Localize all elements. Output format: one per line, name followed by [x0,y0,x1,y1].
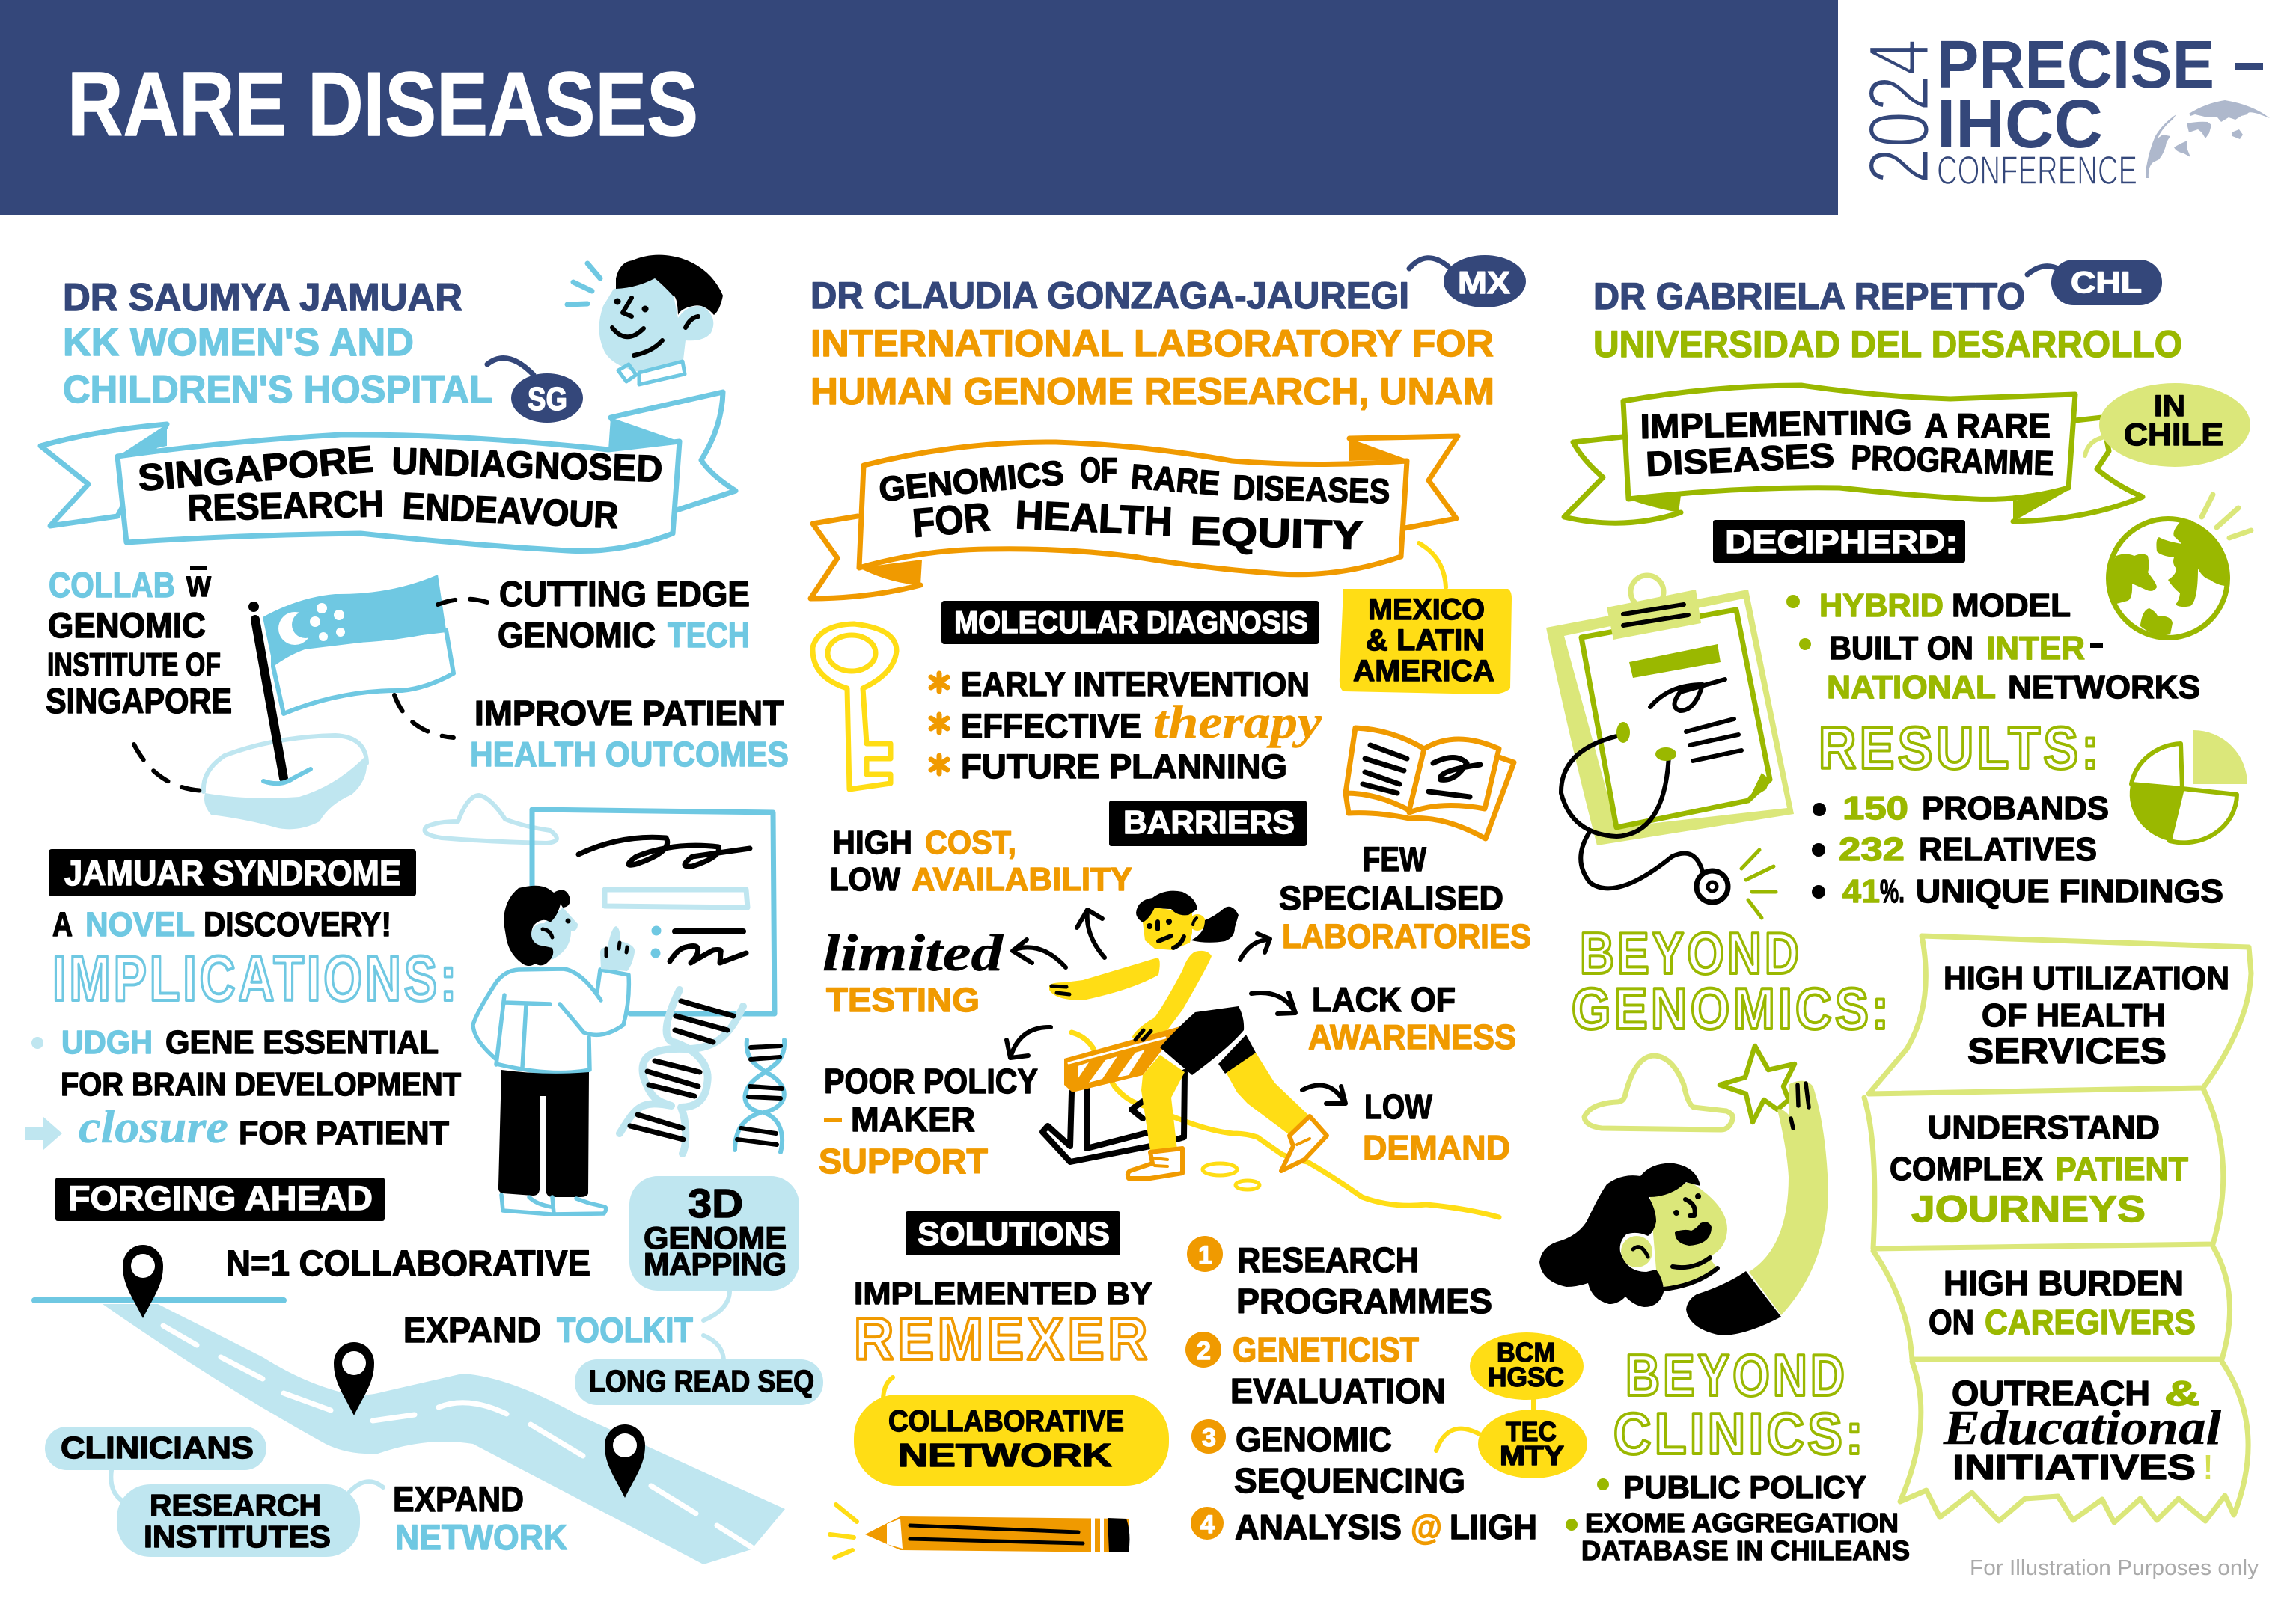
text block: collab with Genomic Institute: INSTITUTE OF [47,646,221,683]
heading: Beyond Genomics [1572,920,1892,1041]
DECIPHERD bullets: BUILT ON [1829,630,1973,667]
heading: Beyond Clinics: BEYOND [1625,1342,1848,1408]
scroll panel text: outreach educational initiatives: OUTREACH [1952,1374,2150,1413]
heading: Beyond Clinics [1613,1342,1866,1466]
bubble: research institutes: RESEARCH [150,1488,321,1522]
heading: Beyond Genomics: GENOMICS: [1572,976,1892,1041]
callout: collaborative network: NETWORK [898,1437,1112,1474]
step 2 [1185,1330,1446,1410]
step 1: 1 [1198,1241,1212,1270]
heading: Solutions: SOLUTIONS [918,1216,1110,1252]
text: N=1 collaborative: N=1 COLLABORATIVE [226,1244,590,1284]
barrier: low demand: DEMAND [1363,1128,1510,1167]
scroll panel text: outreach educational initiatives: INITIATIVES [1952,1448,2196,1487]
results list: UNIQUE FINDINGS [1916,873,2223,910]
scroll panel text: high burden on caregivers [1929,1264,2196,1341]
scroll panel text: outreach educational initiatives [1943,1374,2222,1487]
text block: collab with Genomic Institute: SINGAPORE [46,681,232,720]
illustration: clipboard and stethoscope [1546,575,1794,918]
scroll panel text: complex patient journeys: COMPLEX [1890,1151,2043,1187]
bubble: 3D genome mapping: 3D [688,1181,743,1226]
text block: cutting edge genomic tech [498,574,750,655]
icon: star [1720,1046,1795,1122]
icon: Singapore flag on island [204,575,454,829]
results list [1812,790,2223,910]
heading: DECIPHERD [1713,520,1965,563]
illustration: woman reaching for star [1539,1046,1828,1335]
step 3: SEQUENCING [1234,1461,1465,1500]
step 1 [1187,1236,1492,1320]
barrier: high cost low availability: AVAILABILITY [912,861,1132,898]
text block: collab with Genomic Institute: COLLAB [49,565,175,605]
speaker name and affiliation: DR SAUMYA JAMUAR [63,276,462,319]
text block: improve patient health outcomes: IMPROVE PATIENT [474,694,784,732]
scroll panel text: high utilization: HIGH UTILIZATION [1944,960,2229,997]
banner: Genomics of rare diseases for health equity: HEALTH [1014,492,1173,545]
icon: cloud [1584,1056,1733,1130]
heading: Beyond Genomics: BEYOND [1580,920,1802,986]
icon: pencil [830,1505,1129,1558]
header band [0,0,1838,215]
panel: Dr Gabriela Repetto [1539,260,2259,1580]
barrier: lack of awareness: LACK OF [1312,980,1456,1019]
callout: Mexico and Latin America [1340,543,1512,694]
barrier: high cost low availability: COST, [925,824,1016,861]
text block: collab with Genomic Institute: W [186,572,211,603]
speaker name and affiliation: HUMAN GENOME RESEARCH, UNAM [810,370,1494,412]
heading: Beyond Clinics: CLINICS: [1613,1401,1866,1466]
step 4: 4 [1200,1511,1215,1539]
barrier: high cost low availability: HIGH [832,824,912,861]
barrier: high cost low availability [830,824,1132,898]
bubble: clinicians [45,1427,266,1470]
barrier: limited testing: TESTING [826,981,980,1019]
text block: improve patient health outcomes: HEALTH OUTCOMES [470,735,789,774]
callout: in Chile [2085,383,2250,467]
icon: map pin 1 [123,1245,163,1318]
barrier: high cost low availability: LOW [830,861,900,898]
heading: REMEXER: REMEXER [854,1306,1151,1372]
step 2: EVALUATION [1230,1371,1446,1410]
implications list: UDGH [61,1024,153,1061]
barrier: lack of awareness: AWARENESS [1308,1017,1516,1056]
speaker name and affiliation: DR GABRIELA REPETTO [1593,275,2025,317]
banner: Genomics of rare diseases for health equity: OF [1080,450,1117,489]
banner: Genomics of rare diseases for health equity [810,436,1458,599]
banner: Genomics of rare diseases for health equity: RARE [1129,456,1221,503]
speaker name and affiliation: KK WOMEN'S AND [63,321,414,364]
callout: collaborative network: COLLABORATIVE [888,1405,1124,1438]
implications list: FOR BRAIN DEVELOPMENT [61,1066,461,1103]
title: RARE DISEASES [67,53,698,155]
callout lines from flag [134,599,487,791]
DECIPHERD bullets: INTER [1986,630,2085,667]
text block: cutting edge genomic tech: CUTTING EDGE [499,574,750,613]
illustration: figure jumping hurdle [1042,891,1499,1217]
country tag SG [487,358,583,423]
speaker name and affiliation [1593,275,2182,365]
results list: PROBANDS [1922,790,2109,827]
step 4 [1191,1507,1537,1546]
beyond clinics list: PUBLIC POLICY [1623,1469,1866,1505]
step 3 [1191,1419,1465,1500]
conference logo: IHCC [1937,86,2103,162]
scroll panel text: high utilization: OF HEALTH [1982,997,2166,1034]
icon: key [813,624,897,789]
heading: DECIPHERD: DECIPHERD: [1725,524,1958,560]
country tag MX [1409,255,1526,307]
bubble: research institutes [117,1484,360,1557]
scroll panel text: outreach educational initiatives: ! [2203,1448,2213,1487]
solutions steps [1185,1236,1537,1546]
bubble: 3D genome mapping: MAPPING [644,1246,787,1282]
heading: Forging Ahead: FORGING AHEAD [68,1179,373,1217]
speaker name and affiliation: DR CLAUDIA GONZAGA-JAUREGI [810,275,1409,316]
DECIPHERD bullets: MODEL [1952,587,2071,624]
step 4: LIIGH [1450,1508,1537,1546]
scroll panel text: complex patient journeys: PATIENT [2055,1151,2188,1187]
results list: 232 [1839,831,1905,868]
banner: implementing a rare diseases programme [1564,385,2143,523]
speaker name and affiliation: INTERNATIONAL LABORATORY FOR [810,322,1494,364]
molecular diagnosis list: EFFECTIVE [961,707,1141,745]
DECIPHERD bullets: NETWORKS [2008,669,2200,706]
bubbles: BCM HGSC and TEC MTY [1436,1332,1587,1478]
barrier: few specialised laboratories: LABORATORIES [1282,917,1531,955]
results list: 150 [1842,790,1908,827]
DECIPHERD bullets: NATIONAL [1827,669,1996,706]
banner: implementing a rare diseases programme: PROGRAMME [1851,438,2054,483]
conference logo: CONFERENCE [1937,148,2137,193]
icon: DNA helices [620,990,784,1154]
results list: %. [1880,873,1905,910]
heading: Jamuar Syndrome: JAMUAR SYNDROME [64,853,401,893]
step 1: RESEARCH [1237,1240,1419,1279]
text: expand network [393,1479,567,1557]
speaker name and affiliation: CHILDREN'S HOSPITAL [63,368,492,411]
barrier: few specialised laboratories [1279,840,1531,955]
step 2: GENETICIST [1233,1330,1419,1369]
barrier: low demand [1363,1087,1510,1167]
text block: cutting edge genomic tech: GENOMIC [498,615,656,655]
panel: Dr Saumya Jamuar [25,255,823,1564]
implications list [25,1024,461,1153]
bubbles: BCM HGSC and TEC MTY: HGSC [1488,1362,1564,1392]
bubble: long read seq: LONG READ SEQ [589,1364,814,1398]
molecular diagnosis list [931,665,1322,786]
text block: a novel discovery: NOVEL [85,905,195,943]
results list: RELATIVES [1919,831,2097,868]
roadmap with pins [34,1245,785,1564]
beyond clinics list: EXOME AGGREGATION [1585,1508,1899,1538]
text block: cutting edge genomic tech: TECH [668,615,750,655]
speaker name and affiliation: UNIVERSIDAD DEL DESARROLLO [1593,323,2182,365]
country tag SG: SG [528,381,567,417]
DECIPHERD bullets [1786,587,2200,706]
scroll panel text: complex patient journeys: JOURNEYS [1911,1188,2146,1230]
heading: Results: RESULTS: [1819,714,2102,781]
molecular diagnosis list: FUTURE PLANNING [961,747,1287,786]
banner: Genomics of rare diseases for health equity: GENOMICS [877,453,1066,509]
text block: collab with Genomic Institute: GENOMIC [48,605,206,645]
bubbles: BCM HGSC and TEC MTY: MTY [1500,1440,1564,1471]
heading: Barriers [1109,801,1307,846]
text: expand toolkit: EXPAND [403,1310,541,1350]
heading: Barriers: BARRIERS [1123,804,1295,841]
scroll panel text: high utilization: SERVICES [1967,1032,2167,1071]
text: implemented by: IMPLEMENTED BY [854,1276,1152,1311]
icon: open book [1346,728,1514,839]
barrier: lack of awareness [1308,980,1516,1056]
molecular diagnosis list: EARLY INTERVENTION [961,665,1310,703]
bubble: long read seq [575,1359,823,1405]
scroll panel text: outreach educational initiatives: Educational [1943,1401,2222,1455]
conference logo: PRECISE [1937,28,2214,102]
footnote: For Illustration Purposes only [1970,1556,2259,1580]
speaker name and affiliation [63,276,492,411]
country tag CHL [2027,260,2162,305]
banner: Singapore Undiagnosed Research Endeavour: ENDEAVOUR [402,485,620,536]
callout: in Chile: IN [2154,390,2185,423]
bullet asterisks [931,673,947,774]
whiteboard with scribbles [532,809,775,1014]
arrows from figure to barriers [1007,910,1346,1104]
callout: Mexico and Latin America: & LATIN [1366,624,1485,657]
connectors between network bubbles [111,1470,383,1502]
bubble: 3D genome mapping: GENOME [644,1220,787,1255]
icon: speaker portrait [567,255,723,385]
banner: Singapore Undiagnosed Research Endeavour [40,392,736,551]
bubbles: BCM HGSC and TEC MTY: BCM [1497,1337,1555,1368]
step 1: PROGRAMMES [1236,1282,1492,1320]
scroll panel text: high burden on caregivers: HIGH BURDEN [1944,1264,2184,1303]
bubble: 3D genome mapping [629,1176,799,1291]
scroll panel text: high burden on caregivers: CAREGIVERS [1985,1303,2196,1341]
country tag CHL: CHL [2071,266,2142,299]
scroll panel text: complex patient journeys [1890,1110,2188,1230]
results list: 41 [1842,873,1880,910]
heading: Molecular Diagnosis: MOLECULAR DIAGNOSIS [954,605,1308,640]
text: expand toolkit: TOOLKIT [557,1310,693,1350]
beyond clinics list: DATABASE IN CHILEANS [1581,1535,1910,1566]
banner: Genomics of rare diseases for health equity: DISEASES [1233,468,1390,510]
text: expand toolkit [403,1310,693,1350]
text: expand network: NETWORK [395,1517,567,1557]
bubble: clinicians: CLINICIANS [61,1430,254,1465]
callout: Mexico and Latin America: AMERICA [1353,655,1494,688]
stacked scroll panels [1864,936,2251,1522]
callout: collaborative network [854,1377,1169,1486]
banner: implementing a rare diseases programme: DISEASES [1645,435,1835,483]
icon: pie chart [2130,730,2247,842]
banner: Singapore Undiagnosed Research Endeavour: RESEARCH [187,483,384,529]
barrier: poor policy maker support: MAKER [851,1100,975,1139]
DECIPHERD bullets: HYBRID [1819,587,1944,624]
scroll panel text: outreach educational initiatives: & [2164,1374,2200,1413]
step 4: @ [1411,1508,1442,1546]
country tag MX: MX [1458,265,1510,300]
text block: a novel discovery: A [52,905,73,943]
step 3: GENOMIC [1236,1420,1392,1459]
barrier: few specialised laboratories: FEW [1363,840,1426,878]
text block: a novel discovery [52,905,391,943]
implications list: closure [79,1102,228,1153]
scroll panel text: complex patient journeys: UNDERSTAND [1928,1110,2160,1146]
scroll panel text: high burden on caregivers: ON [1929,1303,1974,1341]
banner: implementing a rare diseases programme: IMPLEMENTING [1640,403,1912,446]
barrier: poor policy maker support: SUPPORT [819,1142,988,1181]
barrier: low demand: LOW [1364,1087,1432,1126]
implications list: GENE ESSENTIAL [165,1024,439,1061]
banner: Genomics of rare diseases for health equity: EQUITY [1190,509,1364,558]
banner: Singapore Undiagnosed Research Endeavour: UNDIAGNOSED [391,440,663,490]
banner: implementing a rare diseases programme: A RARE [1924,406,2051,445]
bubble: research institutes: INSTITUTES [144,1519,331,1554]
barrier: poor policy maker support: POOR POLICY [824,1062,1038,1101]
speaker name and affiliation [810,275,1494,412]
text: expand network: EXPAND [393,1479,524,1519]
banner: Genomics of rare diseases for health equity: FOR [911,495,992,546]
molecular diagnosis list: therapy [1153,697,1322,748]
icon: cloud [425,795,557,843]
barrier: few specialised laboratories: SPECIALISED [1279,879,1503,917]
barrier: limited testing [822,925,1004,1019]
text block: improve patient health outcomes [470,694,789,774]
step 4: ANALYSIS [1235,1508,1402,1546]
bubbles: BCM HGSC and TEC MTY: TEC [1506,1416,1557,1447]
panel: Dr Claudia Gonzaga-Jauregi [810,255,1587,1558]
step 3: 3 [1202,1424,1216,1452]
barrier: limited testing: limited [822,925,1004,982]
scroll panel text: high utilization [1944,960,2229,1071]
connectors to toolkit [703,1291,730,1359]
conference logo [1851,28,2270,193]
barrier: poor policy maker support [819,1062,1038,1181]
banner: Singapore Undiagnosed Research Endeavour: SINGAPORE [136,438,375,499]
icon: map pin 3 [605,1424,645,1498]
text block: a novel discovery: DISCOVERY! [204,905,391,943]
callout: Mexico and Latin America: MEXICO [1368,593,1485,626]
text block: collab with Genomic Institute [46,565,232,720]
implications list: FOR PATIENT [239,1115,449,1151]
heading: Implications: IMPLICATIONS: [52,943,459,1014]
icon: map pin 2 [334,1342,374,1415]
callout: in Chile: CHILE [2124,417,2223,452]
icon: globe [2107,495,2251,637]
beyond clinics list [1566,1469,1910,1566]
step 2: 2 [1197,1337,1211,1365]
illustration: person at whiteboard [473,886,635,1214]
